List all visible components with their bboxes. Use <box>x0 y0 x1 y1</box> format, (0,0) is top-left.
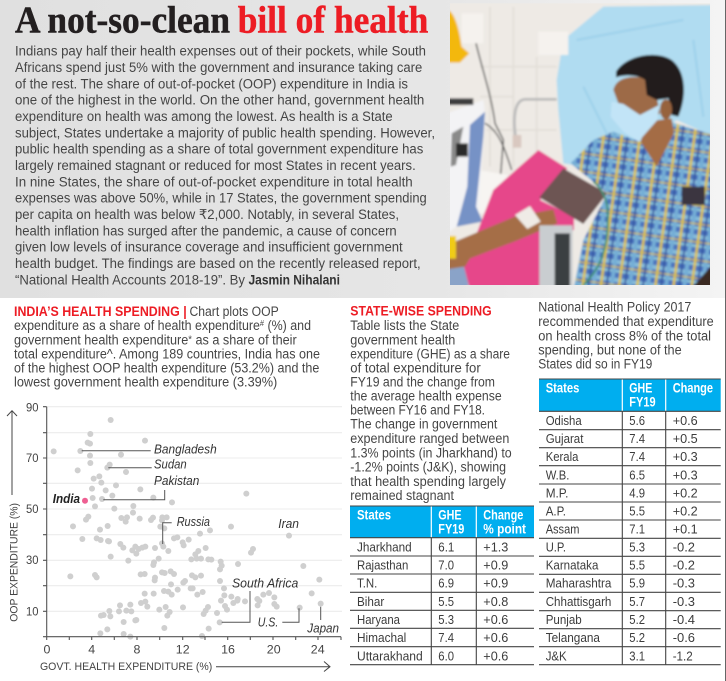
table rows <box>357 540 508 663</box>
text block: National Health Policy note: States did so in FY19 <box>538 357 652 372</box>
x axis title: GOVT. HEALTH EXPENDITURE (%) <box>40 661 212 673</box>
text block: introduction: Jasmin Nihalani <box>248 272 340 287</box>
table rows: 7.4 <box>629 431 645 446</box>
heading and text: State-wise spending: -1.2% points (J&K), showing <box>350 460 506 475</box>
heading and text: India's health spending: as a share of their <box>192 332 297 347</box>
table rows: 5.5 <box>629 558 645 573</box>
text block: National Health Policy note: on health cross 8% of the total <box>538 328 711 343</box>
arrow: x axis <box>216 662 330 672</box>
table rows: +0.1 <box>673 522 698 537</box>
table header: GHE <box>438 507 462 522</box>
table rows: Rajasthan <box>357 558 408 573</box>
data points: right half <box>174 491 324 639</box>
country labels <box>53 441 339 635</box>
title <box>15 0 428 41</box>
table rows: Karnataka <box>546 558 599 573</box>
table rows: 7.4 <box>629 449 645 464</box>
heading and text: India's health spending: INDIA’S HEALTH SPENDING | <box>14 304 187 319</box>
table rows: Himachal <box>357 630 406 645</box>
country labels: India <box>53 491 80 506</box>
table rows: 7.0 <box>438 558 454 573</box>
heading and text: State-wise spending: government health <box>350 332 455 347</box>
axis tick labels: 8 <box>134 642 141 656</box>
heading and text: State-wise spending: STATE-WISE SPENDING <box>350 304 492 319</box>
heading and text: State-wise spending: expenditure ranged between <box>350 431 509 446</box>
axis tick labels: 50 <box>26 502 39 516</box>
table rows: Maharashtra <box>546 576 612 591</box>
text block: introduction: “National Health Accounts 2018-19”. By <box>15 272 245 287</box>
y axis title: OOP EXPENDITURE (%) <box>8 503 20 622</box>
country labels: Pakistan <box>154 473 199 488</box>
table rows: 5.7 <box>629 594 645 609</box>
axis tick labels: 12 <box>176 642 190 656</box>
table rows: U.P. <box>546 540 566 555</box>
table rows: J&K <box>546 648 567 663</box>
text block: National Health Policy note: National Health Policy 2017 <box>538 300 691 315</box>
table rows: +0.6 <box>483 630 508 645</box>
table rows: -0.2 <box>673 558 695 573</box>
axes <box>43 407 341 640</box>
text block: introduction: In nine States, the share of out-of-pocket expenditure in total health <box>15 174 413 189</box>
country labels: Japan <box>306 620 339 635</box>
table rows: 6.0 <box>438 648 454 663</box>
table rows: -1.2 <box>673 648 693 663</box>
heading and text: India's health spending: total expenditure^. Among 189 countries, India has one <box>14 346 320 361</box>
axis tick labels: 0 <box>44 642 51 656</box>
table rows: Assam <box>546 522 579 537</box>
table rows: 4.9 <box>629 485 645 500</box>
heading and text: India's health spending: lowest government health expenditure (3.39%) <box>14 375 277 390</box>
text block: National Health Policy note: spending, but none of the <box>538 342 682 357</box>
axis tick labels: 30 <box>26 553 39 567</box>
text block: National Health Policy note <box>538 300 714 372</box>
table rows: Punjab <box>546 612 582 627</box>
heading and text: State-wise spending: that health spending largely <box>350 474 506 489</box>
arrow: y axis <box>7 411 17 495</box>
axis tick labels: 4 <box>88 642 95 656</box>
table rows: 5.2 <box>629 612 645 627</box>
table header: FY19 <box>629 395 656 410</box>
table rows: +0.6 <box>483 612 508 627</box>
heading and text: State-wise spending: 1.3% points (in Jharkhand) to <box>350 445 512 460</box>
axis tick labels: 20 <box>267 642 281 656</box>
country labels: Russia <box>177 514 210 529</box>
table header: Change <box>673 381 713 396</box>
table rows: Chhattisgarh <box>546 594 611 609</box>
country labels: U.S. <box>258 615 278 630</box>
axis tick labels: 90 <box>26 400 39 414</box>
heading and text: State-wise spending: FY19 and the change from <box>350 375 495 390</box>
table: first state-wise spending <box>350 506 534 665</box>
table rows: +0.9 <box>483 576 508 591</box>
table rows: 6.1 <box>438 540 454 555</box>
text block: introduction: Africans spend just 5% with the government and insurance taking care <box>15 60 422 75</box>
axis tick labels: 16 <box>221 642 235 656</box>
table rows: 5.2 <box>629 630 645 645</box>
table rows: +0.6 <box>673 413 698 428</box>
table rows: -0.3 <box>673 594 695 609</box>
table rows: 5.5 <box>438 594 454 609</box>
table header: States <box>357 507 391 522</box>
text block: introduction: expenditure on health was among the lowest. As health is a State <box>15 109 393 124</box>
right edge rule <box>725 0 726 681</box>
table rows: Telangana <box>546 630 601 645</box>
heading and text: India's health spending: Chart plots OOP <box>190 304 279 319</box>
leader lines <box>82 451 321 622</box>
table rows: +0.3 <box>673 467 698 482</box>
axis tick labels <box>26 400 325 656</box>
data points: left half <box>51 417 177 640</box>
heading and text: State-wise spending: expenditure (GHE) as a share <box>350 346 510 361</box>
table rows: +0.9 <box>483 558 508 573</box>
text block: introduction: one of the highest in the world. On the other hand, government health <box>15 93 424 108</box>
text block: introduction: Indians pay half their health expenses out of their pockets, while South <box>15 44 426 59</box>
text block: introduction: public health spending as a share of total government expenditure has <box>15 142 424 157</box>
heading and text: State-wise spending: the average health expense <box>350 389 502 404</box>
heading and text: India's health spending: of the highest OOP health expenditure (53.2%) and the <box>14 361 319 376</box>
table rows: 5.5 <box>629 503 645 518</box>
text block: introduction: health inflation has surged after the pandemic, a cause of concern <box>15 223 397 238</box>
table rows: +1.3 <box>483 540 508 555</box>
table rows: 3.1 <box>629 648 645 663</box>
table rows: -0.4 <box>673 612 695 627</box>
heading and text: India's health spending: expenditure as a share of health expenditure <box>14 318 279 333</box>
table rows: -0.2 <box>673 540 695 555</box>
table header: % point <box>483 521 526 536</box>
photo: patient having blood pressure taken <box>447 0 713 290</box>
country labels: South Africa <box>232 576 298 591</box>
text block: introduction <box>15 44 435 287</box>
table rows: +0.8 <box>483 594 508 609</box>
table rows: 7.1 <box>629 522 645 537</box>
text block: introduction: per capita on health was below ₹2,000. Notably, in several States, <box>15 207 399 222</box>
table rows: Bihar <box>357 594 385 609</box>
heading and text: State-wise spending: remained stagnant <box>350 488 454 503</box>
table rows: Odisha <box>546 413 582 428</box>
table rows: A.P. <box>546 503 566 518</box>
table rows: 5.3 <box>438 612 454 627</box>
table rows: Jharkhand <box>357 540 412 555</box>
axis tick labels: 10 <box>26 605 39 619</box>
heading and text: State-wise spending: Table lists the State <box>350 318 459 333</box>
table rows: +0.5 <box>673 431 698 446</box>
table header: FY19 <box>438 521 464 536</box>
title: bill of health <box>238 0 428 41</box>
table rows: -0.3 <box>673 576 695 591</box>
text block: introduction: largely remained stagnant or reduced for most States in recent years. <box>15 158 416 173</box>
country labels: Bangladesh <box>154 441 217 456</box>
heading and text: India's health spending: (%) and <box>264 318 311 333</box>
text block: introduction: of the rest. The share of out-of-pocket (OOP) expenditure in India is <box>15 76 408 91</box>
table header <box>539 379 721 411</box>
heading and text: State-wise spending: between FY16 and FY18. <box>350 403 485 418</box>
table: second state-wise spending <box>539 379 721 665</box>
heading and text: State-wise spending: The change in government <box>350 417 498 432</box>
panel: top grey background <box>0 0 726 298</box>
table rows: Gujarat <box>546 431 584 446</box>
heading and text: State-wise spending: of total expenditure for <box>350 360 481 375</box>
country labels: Sudan <box>154 456 187 471</box>
title: A not-so-clean <box>15 0 230 41</box>
text block: introduction: subject, States undertake a majority of public health spending. However, <box>15 125 435 140</box>
table rows: -0.6 <box>673 630 695 645</box>
table rows: 5.3 <box>629 540 645 555</box>
table header: GHE <box>629 381 652 396</box>
axis tick labels: 70 <box>26 451 39 465</box>
table rows: 6.9 <box>438 576 454 591</box>
text block: introduction: given low levels of insurance coverage and insufficient government <box>15 240 403 255</box>
heading and text: India's health spending: * <box>188 334 192 345</box>
table rows: +0.6 <box>483 648 508 663</box>
table rows: Haryana <box>357 612 401 627</box>
table rows: 5.9 <box>629 576 645 591</box>
country labels: Iran <box>278 516 299 531</box>
table rows: 6.5 <box>629 467 645 482</box>
table rows: 5.6 <box>629 413 645 428</box>
table header: Change <box>483 507 523 522</box>
text block: introduction: health budget. The findings are based on the recently released report, <box>15 256 421 271</box>
table rows: 7.4 <box>438 630 454 645</box>
axis tick labels: 24 <box>311 642 325 656</box>
table rows: Kerala <box>546 449 579 464</box>
table header <box>350 506 534 538</box>
table rows: +0.2 <box>673 503 698 518</box>
table rows: W.B. <box>546 467 569 482</box>
heading and text: State-wise spending <box>350 304 512 503</box>
table rows: T.N. <box>357 576 377 591</box>
data point: India <box>82 498 88 504</box>
text block: introduction: expenses was above 50%, while in 17 States, the government spending <box>15 191 427 206</box>
table header: States <box>546 381 579 396</box>
table rows: M.P. <box>546 485 568 500</box>
heading and text: India's health spending <box>14 304 320 390</box>
table rows: +0.2 <box>673 485 698 500</box>
table rows: Uttarakhand <box>357 648 423 663</box>
table rows <box>546 413 698 663</box>
scatter chart: OOP vs government health expenditure <box>7 400 342 673</box>
table rows: +0.3 <box>673 449 698 464</box>
heading and text: India's health spending: government health expenditure <box>14 332 199 347</box>
heading and text: India's health spending: # <box>260 319 265 328</box>
text block: National Health Policy note: recommended that expenditure <box>538 314 714 329</box>
